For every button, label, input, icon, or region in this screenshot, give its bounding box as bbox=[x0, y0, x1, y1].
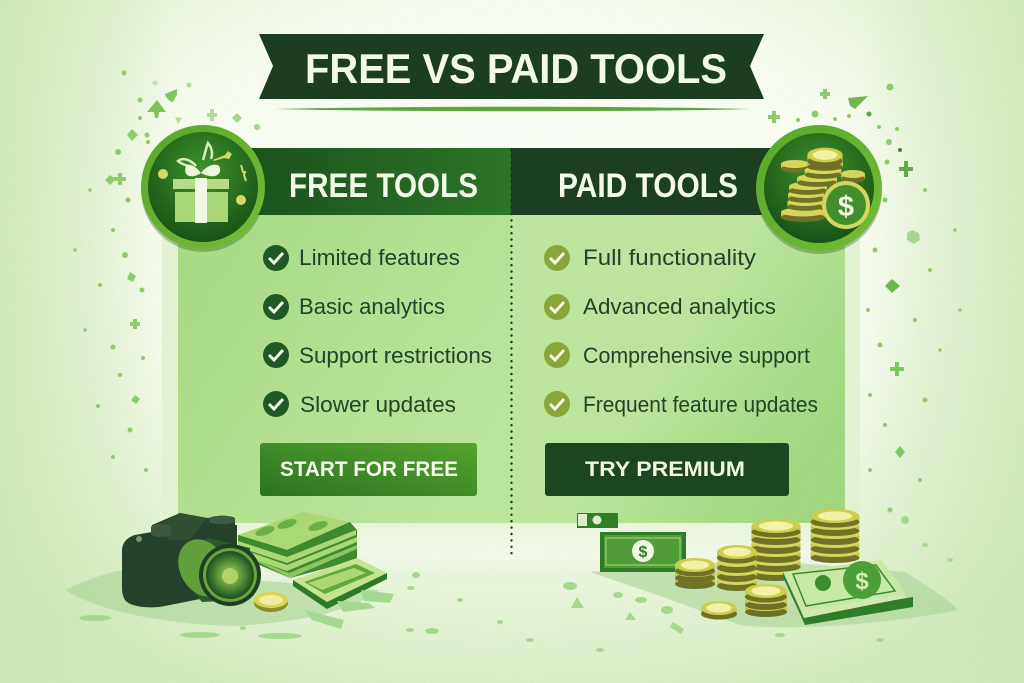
illustration: stack of dollar bills bbox=[783, 560, 913, 625]
icon: dollar coin: $ bbox=[838, 191, 854, 223]
button: start for free: START FOR FREE bbox=[280, 458, 458, 481]
bill on the floor bbox=[293, 558, 387, 609]
paid features list bbox=[544, 245, 818, 417]
feature: advanced analytics: Advanced analytics bbox=[583, 294, 776, 319]
title banner bbox=[259, 34, 764, 99]
dotted divider bbox=[510, 150, 513, 556]
single coin bbox=[701, 601, 737, 620]
free features list bbox=[263, 245, 492, 417]
feature: comprehensive support: Comprehensive support bbox=[583, 343, 810, 368]
button: try premium bbox=[545, 443, 789, 496]
floor band bbox=[162, 523, 860, 583]
panel: paid tools body bbox=[511, 215, 845, 523]
check: limited features bbox=[263, 245, 289, 271]
illustration: free side coin bbox=[254, 592, 288, 612]
coin stack 4 bbox=[811, 509, 859, 563]
coin stack front bbox=[745, 584, 787, 617]
illustration: coin stacks bbox=[675, 509, 859, 620]
coin stack 1 bbox=[675, 558, 715, 589]
header: paid tools bbox=[511, 148, 786, 215]
check: advanced analytics bbox=[544, 294, 570, 320]
coin stack 3 bbox=[751, 519, 801, 581]
lens bbox=[169, 531, 261, 606]
coin stack 2 bbox=[717, 545, 757, 591]
check: comprehensive support bbox=[544, 342, 570, 368]
header: paid tools: PAID TOOLS bbox=[558, 167, 738, 205]
title banner: FREE VS PAID TOOLS bbox=[305, 45, 727, 92]
feature: limited features: Limited features bbox=[299, 245, 460, 270]
layered stack edges bbox=[238, 522, 357, 578]
scattered confetti: left bbox=[73, 70, 260, 472]
check: full functionality bbox=[544, 245, 570, 271]
header: free tools: FREE TOOLS bbox=[289, 167, 478, 205]
scattered confetti: right bbox=[768, 84, 962, 512]
panel texture bbox=[178, 215, 845, 523]
check: support restrictions bbox=[263, 342, 289, 368]
floor shadows bbox=[65, 560, 958, 627]
header: free tools bbox=[245, 148, 511, 215]
feature: slower updates: Slower updates bbox=[300, 392, 456, 417]
button: try premium: TRY PREMIUM bbox=[585, 458, 745, 481]
illustration: stacked cash, free side bbox=[238, 512, 387, 609]
medal: gift icon bbox=[141, 125, 265, 252]
illustration: green bill bbox=[600, 532, 686, 572]
top bill bbox=[238, 512, 350, 550]
feature: support restrictions: Support restrictions bbox=[299, 343, 492, 368]
check: basic analytics bbox=[263, 294, 289, 320]
illustration: floor bill scraps bbox=[304, 590, 394, 629]
illustration: camera bbox=[122, 513, 261, 607]
button: start for free bbox=[260, 443, 477, 496]
feature: frequent feature updates: Frequent feature updates bbox=[583, 392, 818, 417]
panel: free tools body bbox=[178, 215, 511, 523]
illustration: green bill: $ bbox=[639, 544, 648, 561]
check: slower updates bbox=[263, 391, 289, 417]
icon: gift box bbox=[158, 143, 246, 223]
feature: full functionality: Full functionality bbox=[583, 245, 756, 270]
medal: coins icon bbox=[756, 125, 882, 254]
icon: coin stack bbox=[781, 148, 865, 222]
side band behind comparison panel bbox=[162, 205, 860, 525]
illustration: small bill tag bbox=[577, 513, 618, 528]
feature: basic analytics: Basic analytics bbox=[299, 294, 445, 319]
check: frequent feature updates bbox=[544, 391, 570, 417]
floor specks bbox=[79, 516, 953, 652]
title underline bbox=[275, 107, 750, 111]
illustration: stack of dollar bills: $ bbox=[855, 568, 869, 595]
